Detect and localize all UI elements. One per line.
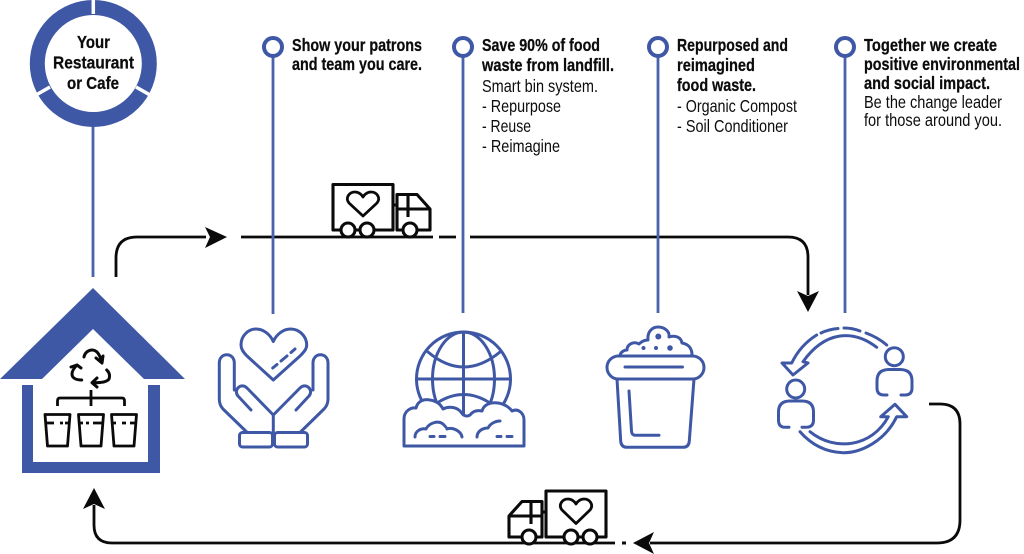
connector line: restaurant to house — [92, 125, 94, 277]
restaurant ring badge: Restaurant — [53, 52, 134, 72]
callout: save food waste: - Reimagine — [482, 136, 560, 156]
icon: recycling arrows — [71, 350, 110, 387]
callout: save food waste: waste from landfill. — [481, 55, 614, 75]
callout: repurposed food waste: - Soil Conditioner — [677, 116, 788, 136]
callout: care: and team you care. — [292, 54, 422, 74]
delivery truck top — [333, 184, 430, 237]
callout: save food waste: - Repurpose — [482, 96, 561, 116]
callout: together: and social impact. — [864, 73, 990, 93]
wheels — [522, 530, 597, 544]
cargo box — [333, 184, 393, 230]
callout: repurposed food waste: Repurposed and — [677, 35, 788, 55]
callout: repurposed food waste — [649, 35, 797, 136]
left hand — [219, 355, 273, 432]
black flow arrow: house to cycle icon — [116, 227, 819, 312]
bin 2 — [78, 414, 104, 446]
restaurant ring badge: Your — [77, 32, 110, 52]
wheels — [341, 223, 417, 237]
callout: repurposed food waste: - Organic Compost — [677, 96, 797, 116]
bushes — [404, 400, 524, 446]
connector line: repurposed — [657, 57, 659, 313]
icon: hands holding heart — [219, 329, 328, 447]
connector line: together — [844, 57, 846, 313]
compost dots — [642, 334, 673, 351]
callout: repurposed food waste: reimagined — [677, 55, 755, 75]
cuffs — [240, 432, 272, 447]
person left — [778, 380, 814, 427]
highlight — [629, 391, 659, 435]
globe — [416, 332, 510, 426]
body — [617, 379, 694, 447]
person right — [877, 348, 912, 395]
restaurant ring badge: or Cafe — [67, 73, 119, 93]
connector line: save — [462, 57, 464, 313]
cab — [509, 502, 546, 537]
callout: care: Show your patrons — [292, 35, 422, 55]
callout: save food waste: Save 90% of food — [482, 35, 600, 55]
black flow arrow: cycle icon back to house — [83, 404, 960, 554]
heart — [241, 329, 307, 380]
callout: together: Together we create — [864, 35, 997, 55]
icon: people cycle — [778, 328, 912, 453]
cab — [393, 194, 430, 230]
callout: together — [836, 35, 1020, 130]
bin 1 — [45, 414, 70, 446]
roof — [0, 288, 185, 379]
callout: save food waste: - Reuse — [482, 116, 531, 136]
walls — [22, 385, 160, 473]
callout: save food waste — [454, 35, 614, 156]
tree connector — [58, 390, 124, 406]
arrow top — [782, 335, 877, 375]
heart — [347, 192, 379, 216]
heart highlight — [273, 349, 295, 368]
right hand — [273, 355, 328, 432]
icon: compost bucket — [607, 327, 704, 447]
cargo box — [546, 491, 606, 537]
heart — [560, 499, 592, 524]
rim — [607, 356, 704, 379]
callout: care — [264, 35, 422, 74]
compost top — [620, 327, 692, 355]
connector line: care — [272, 57, 274, 314]
bush detail — [415, 421, 512, 437]
icon: globe with bushes — [404, 332, 524, 446]
callout: save food waste: Smart bin system. — [482, 76, 598, 96]
delivery truck bottom — [509, 491, 606, 544]
bin 3 — [112, 414, 136, 446]
dashed arc top — [821, 328, 887, 345]
callout: repurposed food waste: food waste. — [677, 75, 756, 95]
restaurant ring badge — [36, 0, 150, 120]
arrow bottom — [800, 404, 907, 453]
house — [0, 288, 185, 473]
